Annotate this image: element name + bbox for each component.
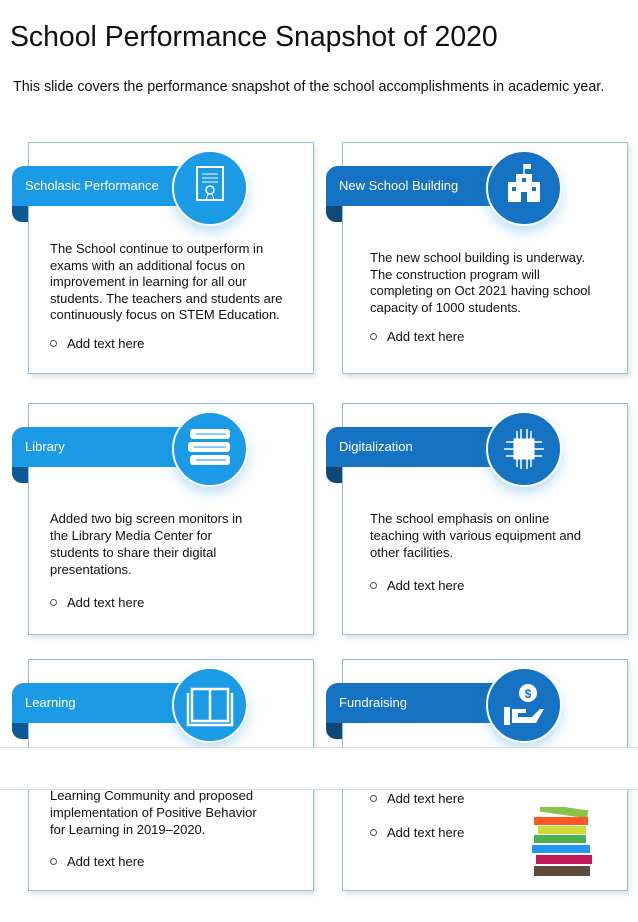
banner: fundraising: Fundraising (339, 695, 407, 710)
icon: certificate (172, 150, 248, 226)
subtitle: This slide covers the performance snapshot of the school accomplishments in academic year. (13, 79, 604, 95)
banner: fundraising (326, 683, 511, 723)
banner: scholasic performance (12, 166, 197, 206)
banner: new school building (326, 166, 511, 206)
banner: scholasic performance: Scholasic Performance (25, 178, 159, 193)
panel: fundraising: Add text here (387, 825, 464, 840)
text: continuously focus on STEM Education. (50, 307, 280, 322)
text: Learning Community and proposed (50, 788, 253, 803)
panel: new school building (326, 142, 632, 378)
text: other facilities. (370, 545, 453, 560)
panel: digitalization (326, 403, 632, 640)
text: Added two big screen monitors in (50, 511, 242, 526)
panel: learning: Add text here (67, 854, 144, 869)
title: School Performance Snapshot of 2020 (10, 21, 498, 53)
bullets: Add text here (387, 791, 464, 806)
panel: scholasic performance: Add text here (67, 336, 144, 351)
text: The school emphasis on online (370, 511, 549, 526)
icon: building (486, 150, 562, 226)
banner: new school building: New School Building (339, 178, 458, 193)
icon: hand with coin: $ (525, 687, 532, 701)
icon: stack of books (532, 807, 592, 876)
text: The new school building is underway. (370, 250, 585, 265)
text: The construction program will (370, 266, 540, 282)
banner: digitalization (326, 427, 511, 467)
white overlay strip (0, 747, 638, 790)
banner: digitalization: Digitalization (339, 439, 413, 454)
text: teaching with various equipment and (370, 528, 581, 543)
icon: chip (486, 411, 562, 487)
panel: learning (12, 659, 318, 896)
banner: library (12, 427, 197, 467)
panel: library: Add text here (67, 595, 144, 610)
text (50, 511, 242, 577)
icon: books (172, 411, 248, 487)
text (50, 241, 282, 322)
panel: new school building: Add text here (387, 329, 464, 344)
panel: digitalization: Add text here (387, 578, 464, 593)
banner: learning (12, 683, 197, 723)
text: completing on Oct 2021 having school (370, 283, 590, 298)
text (370, 511, 581, 560)
banner: learning: Learning (25, 695, 76, 710)
text: capacity of 1000 students. (370, 300, 521, 314)
text: improvement in learning for all our (50, 274, 247, 289)
panel: library (12, 403, 318, 640)
panel: scholasic performance (12, 142, 318, 378)
text: for Learning in 2019–2020. (50, 822, 205, 837)
icon: open book (172, 667, 248, 743)
text: presentations. (50, 562, 132, 577)
text: The School continue to outperform in (50, 241, 263, 256)
icon: hand with coin (486, 667, 562, 743)
text: students to share their digital (50, 545, 216, 560)
panel: fundraising (326, 659, 632, 896)
text (370, 250, 590, 314)
text: the Library Media Center for (50, 528, 212, 543)
text: students. The teachers and students are (50, 290, 282, 306)
banner: library: Library (25, 439, 65, 454)
text: exams with an additional focus on (50, 258, 245, 272)
text (50, 788, 257, 837)
text: implementation of Positive Behavior (50, 805, 257, 820)
